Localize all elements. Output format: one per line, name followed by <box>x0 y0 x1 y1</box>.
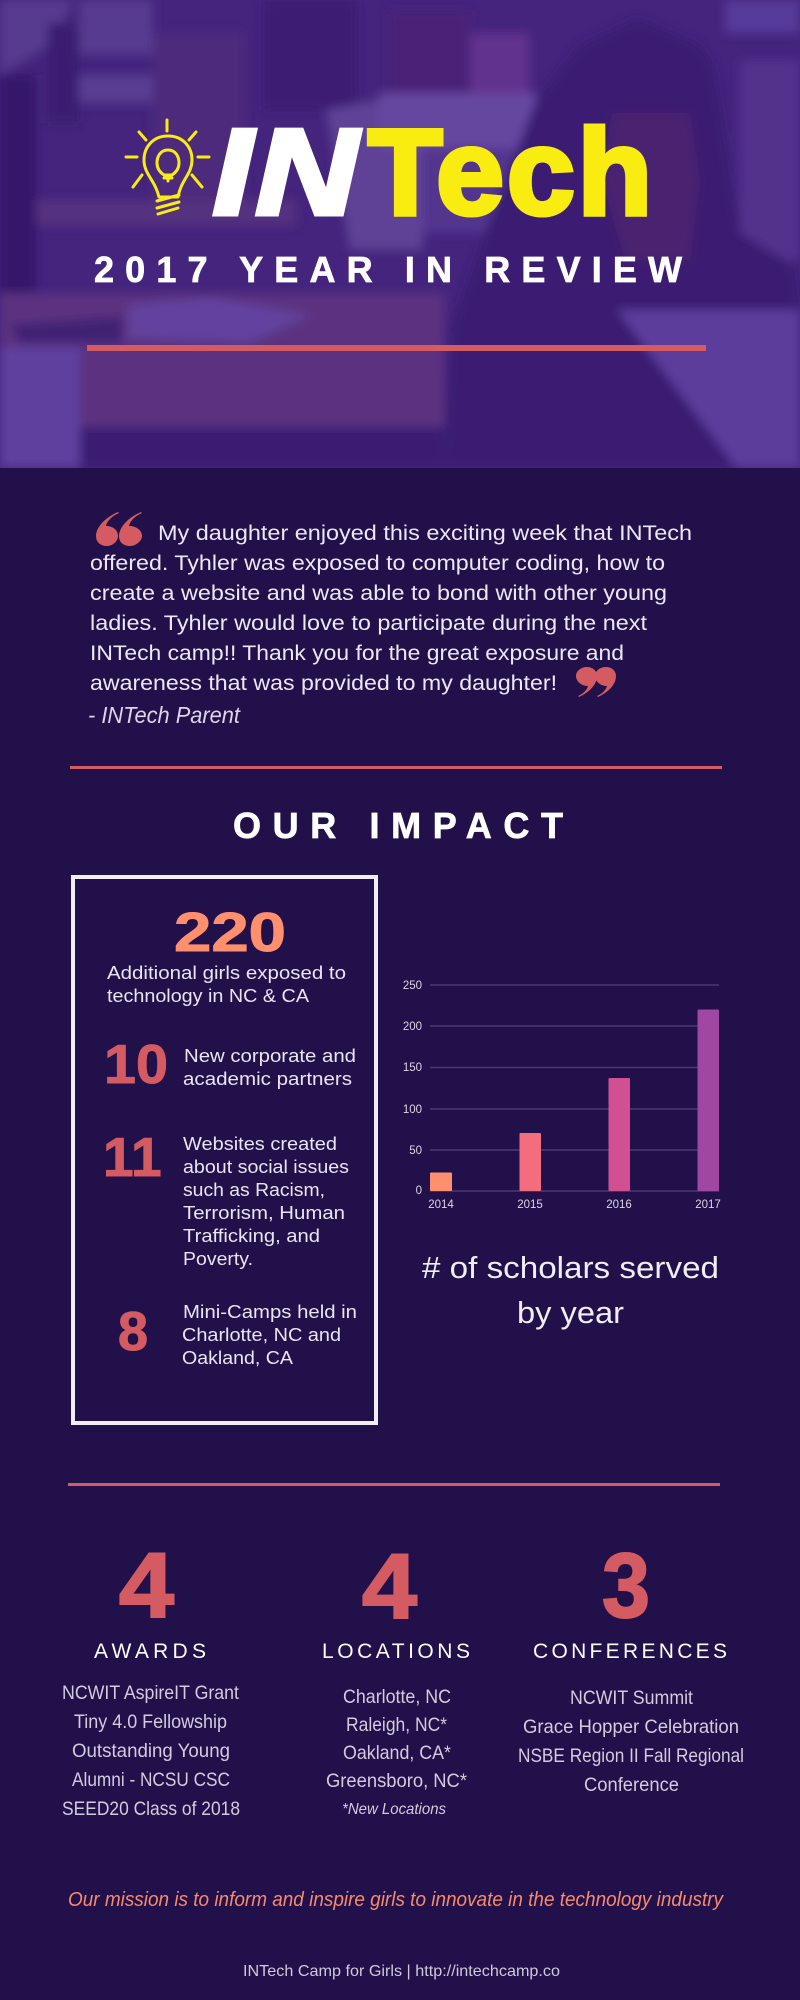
column: conferences: CONFERENCES <box>533 1640 727 1663</box>
column: conferences: NCWIT Summit <box>570 1687 694 1709</box>
column: awards: SEED20 Class of 2018 <box>62 1798 240 1820</box>
x axis labels: 2016 <box>606 1199 632 1211</box>
y axis labels: 0 <box>416 1185 422 1197</box>
column: locations: LOCATIONS <box>322 1640 470 1663</box>
stat: 220 girls <box>107 901 346 1006</box>
divider <box>68 1483 720 1486</box>
x axis labels: 2014 <box>428 1199 454 1211</box>
quote text: ladies. Tyhler would love to participate during the next <box>90 612 647 635</box>
column: conferences: Grace Hopper Celebration <box>523 1716 739 1738</box>
column: awards: AWARDS <box>94 1640 206 1663</box>
column: conferences: NSBE Region II Fall Regional <box>518 1745 744 1767</box>
stat: 220 girls: 220 <box>174 901 286 963</box>
column: locations: Raleigh, NC* <box>346 1714 447 1736</box>
quote text: offered. Tyhler was exposed to computer coding, how to <box>90 552 665 575</box>
chart caption: # of scholars served <box>422 1250 719 1285</box>
stat: 11 websites: Terrorism, Human <box>183 1203 345 1223</box>
logo: INTech with lightbulb <box>126 104 655 240</box>
quote text: My daughter enjoyed this exciting week that INTech <box>158 522 692 545</box>
column: locations: 4 <box>362 1536 417 1638</box>
column: conferences: 3 <box>602 1535 650 1637</box>
mission statement: Our mission is to inform and inspire girls to innovate in the technology industry <box>68 1889 724 1911</box>
testimonial quote <box>88 512 692 728</box>
stat: 8 mini-camps: 8 <box>118 1300 148 1362</box>
column: awards: NCWIT AspireIT Grant <box>62 1682 240 1704</box>
y axis labels: 50 <box>409 1145 422 1157</box>
logo word IN: IN <box>213 104 361 240</box>
stat: 11 websites: such as Racism, <box>183 1180 325 1200</box>
stat: 8 mini-camps: Charlotte, NC and <box>182 1325 341 1345</box>
stat: 8 mini-camps <box>118 1300 357 1368</box>
icon: opening quote mark <box>96 512 142 546</box>
logo word Tech: Tech <box>368 104 655 240</box>
y axis labels: 250 <box>403 980 422 992</box>
column: conferences <box>518 1535 744 1796</box>
x axis labels <box>428 1199 721 1211</box>
column: awards <box>62 1535 240 1820</box>
x axis labels: 2017 <box>695 1199 721 1211</box>
bars <box>430 1010 719 1191</box>
stat: 8 mini-camps: Oakland, CA <box>182 1348 293 1368</box>
subtitle: 2017 YEAR IN REVIEW <box>94 249 682 290</box>
column: locations: Greensboro, NC* <box>326 1770 467 1792</box>
divider <box>70 766 722 769</box>
header photo background <box>0 0 800 468</box>
stat: 10 partners: New corporate and <box>184 1046 356 1066</box>
column: locations: Oakland, CA* <box>343 1742 451 1764</box>
chart caption: by year <box>517 1295 624 1330</box>
y axis labels: 200 <box>403 1021 422 1033</box>
heading: our impact: OUR IMPACT <box>233 805 563 846</box>
icon: lightbulb <box>126 120 209 214</box>
column: locations: Charlotte, NC <box>343 1686 451 1708</box>
panel: impact stats <box>73 877 376 1423</box>
stat: 11 websites: Trafficking, and <box>183 1226 320 1246</box>
chart caption <box>422 1250 719 1330</box>
stat: 220 girls: Additional girls exposed to <box>107 963 346 983</box>
column: awards: Alumni - NCSU CSC <box>72 1769 230 1791</box>
quote text: create a website and was able to bond with other young <box>90 582 667 605</box>
header divider <box>87 345 706 351</box>
stat: 11 websites: 11 <box>103 1126 162 1188</box>
stat: 10 partners: 10 <box>104 1033 168 1095</box>
stat: 11 websites: Websites created <box>183 1134 337 1154</box>
stat: 10 partners: academic partners <box>183 1069 352 1089</box>
footer: INTech Camp for Girls | http://intechcamp.co <box>243 1963 560 1980</box>
bar chart: scholars served by year <box>403 980 721 1211</box>
quote text: INTech camp!! Thank you for the great exposure and <box>90 642 624 665</box>
stat: 11 websites <box>103 1126 349 1269</box>
column: awards: Tiny 4.0 Fellowship <box>74 1711 227 1733</box>
stat: 11 websites: Poverty. <box>183 1249 253 1269</box>
y axis labels: 150 <box>403 1062 422 1074</box>
quote text: awareness that was provided to my daughter! <box>90 672 557 695</box>
column: locations <box>322 1536 470 1818</box>
y axis labels: 100 <box>403 1104 422 1116</box>
quote text <box>90 522 692 695</box>
stat: 8 mini-camps: Mini-Camps held in <box>183 1302 357 1322</box>
column: conferences: Conference <box>584 1774 679 1796</box>
stat: 220 girls: technology in NC & CA <box>107 986 309 1006</box>
column: locations: *New Locations <box>342 1801 446 1818</box>
column: awards: 4 <box>119 1535 174 1637</box>
stat: 10 partners <box>104 1033 356 1095</box>
quote attribution: - INTech Parent <box>88 702 242 728</box>
column: awards: Outstanding Young <box>72 1740 230 1762</box>
y axis labels <box>403 980 422 1197</box>
x axis labels: 2015 <box>517 1199 543 1211</box>
stat: 11 websites: about social issues <box>183 1157 349 1177</box>
icon: closing quote mark <box>576 667 616 697</box>
